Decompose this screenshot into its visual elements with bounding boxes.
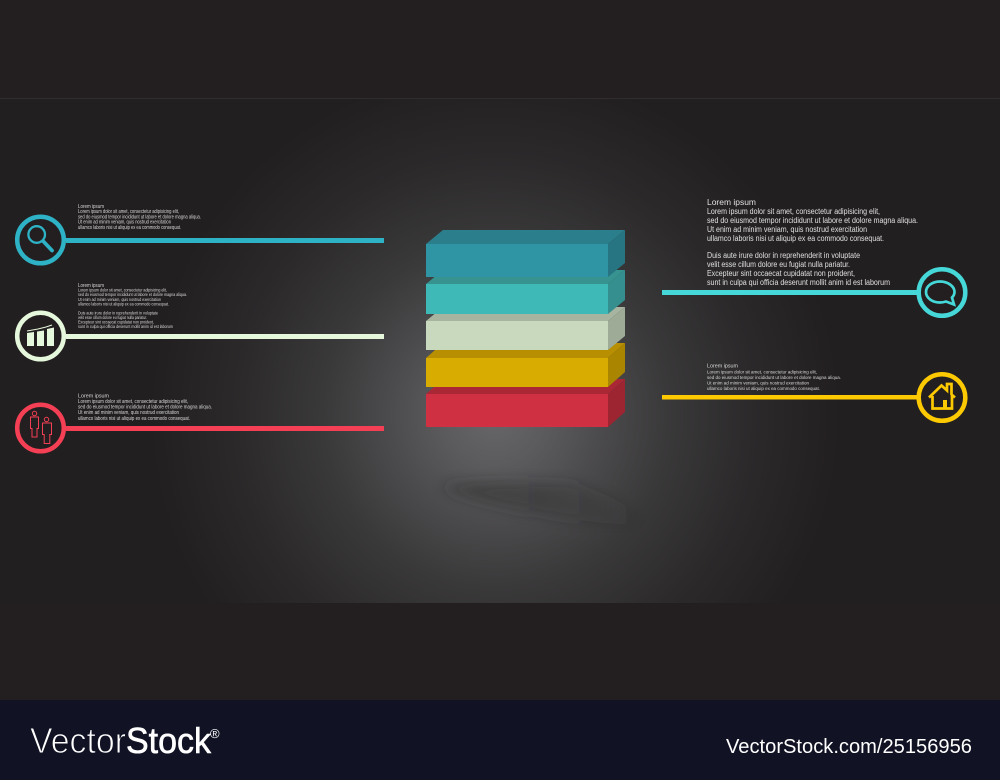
callout: speech: [662, 269, 965, 316]
block: red: [426, 379, 625, 427]
text: speech: ullamco laboris nisi ut aliquip ex ea commodo consequat.: [707, 234, 884, 243]
text: people: sed do eiusmod tempor incididunt ut labore et dolore magna aliqua.: [78, 405, 212, 411]
text: chart: ullamco laboris nisi ut aliquip ex ea commodo consequat.: [78, 302, 169, 306]
floor shadow: [440, 482, 650, 526]
text: home: [707, 364, 841, 391]
text: search: [78, 204, 201, 231]
text: people: Lorem ipsum: [78, 394, 109, 400]
text: speech: sed do eiusmod tempor incididunt ut labore et dolore magna aliqua.: [707, 216, 918, 225]
logo: Stock: [126, 720, 212, 761]
logo: Vector: [30, 720, 126, 761]
text: search: Lorem ipsum dolor sit amet, consectetur adipisicing elit,: [78, 209, 179, 215]
text: chart: Lorem ipsum dolor sit amet, consectetur adipisicing elit,: [78, 288, 167, 292]
text: chart: Excepteur sint occaecat cupidatat non proident,: [78, 320, 154, 324]
stacked 3D bar: [426, 230, 625, 427]
text: search: Ut enim ad minim veniam, quis nostrud exercitation: [78, 220, 171, 226]
text: people: [78, 394, 212, 422]
text: speech: Ut enim ad minim veniam, quis nostrud exercitation: [707, 225, 867, 234]
block: pale green: [426, 307, 625, 350]
text: chart: sed do eiusmod tempor incididunt ut labore et dolore magna aliqua.: [78, 292, 187, 297]
text: chart: Duis aute irure dolor in reprehenderit in voluptate: [78, 310, 159, 316]
callout: home: [662, 374, 965, 421]
text: speech: [707, 197, 918, 287]
footer band: [0, 700, 1000, 780]
callout: people: [17, 405, 384, 451]
block: turquoise: [426, 270, 625, 314]
logo: [30, 720, 220, 761]
text: home: Ut enim ad minim veniam, quis nostrud exercitation: [707, 381, 809, 386]
logo: ®: [210, 726, 220, 741]
block: teal: [426, 230, 625, 277]
callout: search: [17, 217, 384, 263]
text: speech: Duis aute irure dolor in reprehenderit in voluptate: [707, 251, 860, 260]
text: home: Lorem ipsum: [707, 364, 738, 370]
image id: VectorStock.com/25156956: [726, 736, 972, 758]
text: home: ullamco laboris nisi ut aliquip ex ea commodo consequat.: [707, 386, 820, 391]
icon: speech bubble: [926, 282, 954, 304]
callout: chart: [17, 313, 384, 359]
text: chart: [78, 283, 187, 329]
text: speech: velit esse cillum dolore eu fugiat nulla pariatur.: [707, 260, 850, 269]
text: chart: velit esse cillum dolore eu fugiat nulla pariatur.: [78, 315, 147, 320]
text: people: ullamco laboris nisi ut aliquip ex ea commodo consequat.: [78, 416, 190, 422]
text: speech: Excepteur sint occaecat cupidatat non proident,: [707, 269, 855, 278]
text: people: Lorem ipsum dolor sit amet, consectetur adipisicing elit,: [78, 399, 188, 405]
text: home: Lorem ipsum dolor sit amet, consectetur adipisicing elit,: [707, 370, 817, 374]
text: home: sed do eiusmod tempor incididunt ut labore et dolore magna aliqua.: [707, 375, 841, 380]
icon: people: [30, 411, 52, 444]
icon: bar chart: [27, 325, 54, 346]
text: chart: Ut enim ad minim veniam, quis nostrud exercitation: [78, 297, 162, 302]
spotlight panel: [0, 98, 1000, 603]
text: speech: Lorem ipsum dolor sit amet, consectetur adipisicing elit,: [707, 207, 880, 216]
icon: house: [929, 384, 955, 408]
text: chart: sunt in culpa qui officia deserunt mollit anim id est laborum: [78, 324, 173, 329]
text: speech: Lorem ipsum: [707, 197, 756, 207]
text: search: sed do eiusmod tempor incididunt ut labore et dolore magna aliqua.: [78, 214, 201, 220]
block: yellow: [426, 343, 625, 387]
text: search: Lorem ipsum: [78, 204, 104, 210]
icon: magnifier: [28, 226, 52, 250]
text: search: ullamco laboris nisi ut aliquip ex ea commodo consequat.: [78, 225, 181, 231]
text: people: Ut enim ad minim veniam, quis nostrud exercitation: [78, 410, 179, 416]
text: speech: sunt in culpa qui officia deserunt mollit anim id est laborum: [707, 278, 890, 287]
text: chart: Lorem ipsum: [78, 283, 104, 289]
